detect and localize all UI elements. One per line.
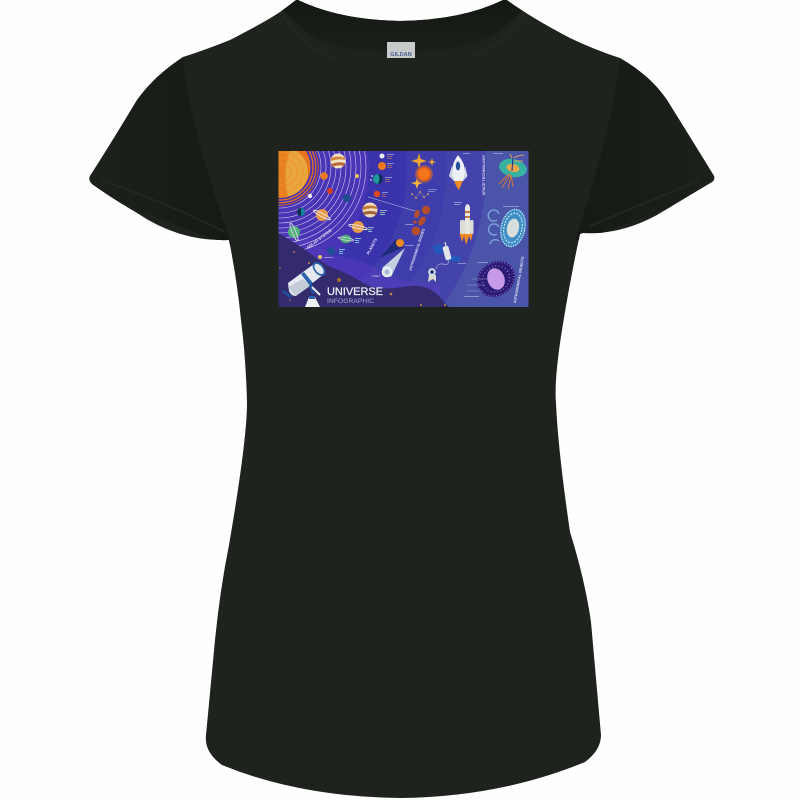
section title: astronomical objects: ASTRONOMICAL OBJECTS xyxy=(513,256,525,303)
rocket one xyxy=(449,153,470,190)
sun xyxy=(278,151,319,206)
stars and small sun xyxy=(411,153,436,189)
orange comet xyxy=(380,239,414,258)
dark foreground wave xyxy=(278,233,450,308)
arc gauges xyxy=(488,210,499,244)
panel background bands xyxy=(278,151,528,307)
section title: space technology: SPACE TECHNOLOGY xyxy=(482,154,486,195)
title block: UNIVERSE xyxy=(327,286,383,298)
pointer line to asteroids xyxy=(368,197,415,211)
astronaut xyxy=(428,268,436,282)
neck label: Gildan tag: GILDAN xyxy=(390,52,412,58)
title block: INFOGRAPHIC xyxy=(327,298,374,305)
title block xyxy=(328,287,383,303)
orbit rings xyxy=(278,151,366,250)
neck label: Gildan tag xyxy=(387,42,415,58)
rocket two xyxy=(454,202,474,245)
white comet: COMET xyxy=(372,275,381,278)
asteroids xyxy=(405,206,430,235)
section title: planets: PLANETS xyxy=(366,237,378,255)
t-shirt body xyxy=(85,0,720,798)
planets column xyxy=(318,154,386,259)
wormhole xyxy=(493,153,529,189)
t-shirt mockup with universe infographic print xyxy=(89,0,714,798)
satellite xyxy=(432,242,466,269)
purple galaxy xyxy=(464,261,515,297)
section title: astronomical bodies: ASTRONOMICAL BODIES xyxy=(408,228,426,271)
constellation xyxy=(411,189,437,199)
section title: solar system: SOLAR SYSTEM xyxy=(306,229,333,250)
planet data labels xyxy=(324,154,394,258)
white comet xyxy=(372,248,405,278)
solar system planets xyxy=(288,154,359,241)
telescope xyxy=(283,260,328,307)
printed universe infographic panel xyxy=(278,151,528,307)
spiral galaxy xyxy=(500,206,526,248)
